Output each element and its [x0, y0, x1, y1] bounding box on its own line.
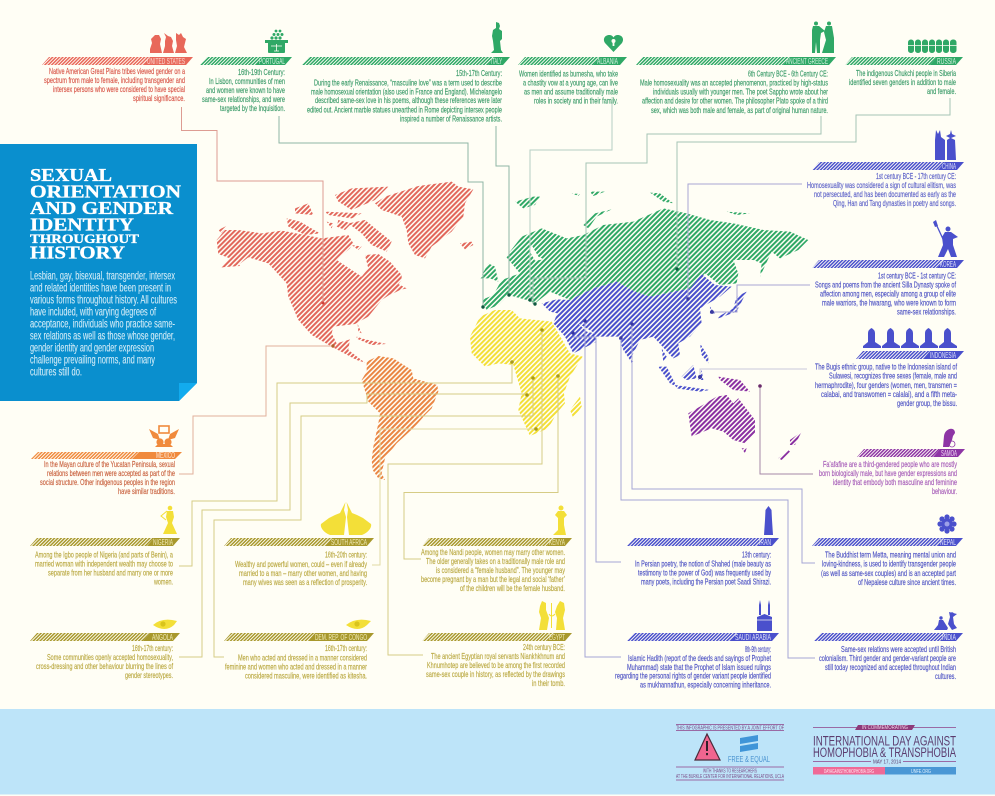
label bar: [636, 57, 836, 66]
text: Muhammad) state that the Prophet of Islam issued rulings: [627, 663, 771, 672]
icon: two egyptian figures: [539, 601, 565, 630]
map: south and east asia: [542, 274, 747, 392]
label bar: CHINA: [942, 162, 956, 171]
label bar: INDIA: [942, 633, 957, 642]
panel: Indonesia: [815, 328, 964, 408]
panel: Egypt: [422, 601, 572, 688]
text: individuals usually with younger men. The poet Sappho wrote about her: [653, 88, 828, 96]
title: IDENTITY: [30, 214, 134, 234]
label bar: [30, 538, 180, 547]
text: [35, 550, 173, 586]
text: gender group, the bissu.: [897, 399, 957, 408]
label bar: [857, 449, 965, 458]
text: a chastity vow at a young age, can live: [523, 78, 618, 88]
text: [849, 69, 956, 96]
icon: warrior with axe: [933, 220, 958, 257]
text: become pregnant by a man but the legal and social ‘father’: [421, 575, 565, 584]
panel: Albania: [518, 35, 627, 105]
label bar: [31, 451, 182, 460]
text: as mukhannathun, especially concerning inheritance.: [640, 680, 771, 690]
intro text: [30, 268, 177, 378]
text: 16th-17th century:: [132, 644, 173, 653]
icon: two women in wide skirts: [321, 502, 371, 535]
text: 15th-17th Century:: [456, 69, 502, 78]
text: relations between men were accepted as part of the: [47, 469, 175, 478]
panel: Nigeria: [30, 506, 180, 586]
panel: Democratic Republic of Congo: [224, 620, 374, 680]
text: in their tomb.: [532, 679, 565, 688]
panel: title and intro: [0, 144, 197, 401]
text: intersex persons who were considered to have special: [53, 85, 185, 94]
panel: Ancient Greece: [636, 22, 836, 115]
icon: five capped busts: [863, 328, 957, 348]
map: north america: [217, 182, 473, 363]
icon: two figures: [812, 22, 834, 53]
text: [635, 550, 772, 586]
icon: robed figure: [764, 506, 773, 535]
label bar: INDONESIA: [930, 351, 956, 360]
icon: kaaba and minarets: [757, 600, 772, 631]
text: regarding the personal rights of gender variant people identified: [615, 672, 771, 680]
text: same-sex relationships, and were: [202, 95, 285, 104]
panel: China: [807, 130, 964, 208]
label bar: [627, 633, 779, 642]
text: Male homosexuality was an accepted phenomenon, practiced by high-status: [640, 78, 828, 88]
text: married to a man – marry other women, and having: [239, 569, 367, 578]
label bar: UNITED STATES: [147, 57, 185, 66]
text: The older generally takes on a traditionally male role and: [426, 557, 565, 566]
label bar: [814, 633, 963, 642]
text: married woman with independent wealth may choose to: [35, 560, 173, 568]
label bar: IRAN: [759, 538, 771, 547]
text: [426, 643, 565, 688]
icon: eye: [346, 620, 371, 629]
panel: Saudi Arabia: 8th-9th century:: [745, 645, 771, 654]
text: targeted by the Inquisition.: [220, 104, 285, 113]
panel: Portugal: [200, 30, 292, 113]
intro text: challenge prevailing norms, and many: [30, 352, 155, 366]
text: roles in society and in their family.: [534, 96, 618, 106]
logo: warning triangle: [695, 734, 720, 760]
label bar: ANGOLA: [152, 633, 174, 642]
text: separate from her husband and marry one or more: [48, 568, 173, 578]
credits: [676, 724, 784, 780]
text: [815, 362, 957, 408]
icon: mandala flower: [937, 514, 957, 534]
title: AND GENDER: [30, 198, 174, 218]
text: and women were known to have: [206, 86, 285, 95]
label bar: DEM. REP. OF CONGO: [315, 633, 367, 642]
panel: Samoa: [819, 429, 965, 496]
panel: United States: [42, 33, 193, 103]
text: Wealthy and powerful women, could – even if already: [235, 560, 368, 569]
text: [821, 550, 956, 587]
intro text: and related identities have been present in: [30, 280, 171, 294]
idahot logo: MAY 17, 2014: [873, 760, 901, 766]
text: affection and desire for other women. The philosopher Plato spoke of a third: [642, 96, 828, 106]
text: 13th century:: [742, 550, 771, 560]
label bar: [30, 633, 180, 642]
text: Some communities openly accepted homosexuality,: [47, 653, 173, 662]
text: spectrum from male to female, including transgender and: [44, 76, 185, 85]
text: testimony to the power of God) was frequently used by: [638, 568, 772, 578]
icon: woman in gown: [161, 506, 177, 534]
credits: AT THE BURKLE CENTER FOR INTERNATIONAL RELATIONS, UCLA: [676, 774, 784, 780]
text: [225, 644, 367, 680]
text: [819, 645, 956, 681]
label bar: [302, 57, 510, 66]
icon: standing woman: [553, 506, 567, 535]
text: cross-dressing and other behaviour blurring the lines of: [36, 662, 173, 671]
text: The ancient Egyptian royal servants Niankhkhnum and: [431, 652, 565, 661]
label bar: EGYPT: [549, 633, 565, 642]
text: women.: [153, 578, 173, 586]
title: ORIENTATION: [30, 182, 181, 202]
text: social structure. Other indigenous peoples in the region: [40, 478, 175, 487]
icon: heart with keyhole: [604, 35, 623, 52]
credits: THIS INFOGRAPHIC IS PRESENTED BY A JOINT EFFORT OF: [676, 726, 784, 732]
intro text: gender identity and gender expression: [30, 340, 154, 354]
icon: statue: [491, 22, 503, 53]
text: [421, 548, 566, 593]
connector lines: [179, 98, 950, 658]
label bar: [812, 260, 964, 269]
idahot logo: IN COMMEMORATING: [862, 725, 908, 731]
panel: South Africa: [224, 502, 374, 587]
text: spiritual significance.: [133, 94, 185, 103]
text: [519, 70, 618, 106]
label bar: ALBANIA: [597, 57, 619, 66]
label bar: [422, 633, 572, 642]
icon: seven dolls: [908, 40, 957, 53]
text: male homosexual orientation (also used in France and England). Michelangelo: [311, 88, 502, 96]
panel: Iran: [627, 506, 779, 586]
title: [30, 165, 181, 262]
text: many poets, including the Persian poet Saadi Shirazi.: [641, 578, 771, 586]
label bar: RUSSIA: [937, 57, 957, 66]
text: have similar traditions.: [118, 487, 175, 496]
location dots: [322, 267, 762, 431]
text: of the children will be the female husband.: [460, 584, 565, 593]
panel: India: [814, 612, 963, 681]
label bar: ITALY: [491, 57, 502, 66]
text: [235, 550, 368, 587]
text: as men and assume traditionally male: [524, 88, 618, 96]
panel: Nepal: [812, 514, 963, 587]
text: [44, 67, 185, 103]
world map: [217, 182, 808, 480]
label bar: SAUDI ARABIA: [735, 633, 772, 642]
text: [36, 644, 173, 680]
text: During the early Renaissance, “masculine love” was a term used to describe: [314, 78, 502, 88]
panel: Kenya: [421, 506, 572, 593]
text: Among the Igbo people of Nigeria (and parts of Benin), a: [35, 550, 173, 560]
text: [202, 68, 285, 113]
label bar: [42, 57, 193, 66]
text: [615, 645, 771, 690]
text: In the Mayan culture of the Yucatan Peninsula, sexual: [44, 460, 175, 469]
text: gender stereotypes.: [125, 671, 173, 680]
title: THROUGHOUT: [30, 232, 140, 246]
label bar: MEXICO: [156, 451, 175, 460]
map: oceania: [688, 377, 802, 460]
text: 16th-20th century:: [325, 550, 367, 560]
panel: Italy: [302, 22, 510, 124]
text: In Persian poetry, the notion of Shahed (male beauty as: [635, 560, 771, 568]
label bar: KENYA: [549, 538, 565, 547]
panel: Angola: [30, 620, 180, 680]
text: described same-sex love in his poems, although these references were later: [315, 96, 502, 105]
title: SEXUAL: [30, 165, 112, 185]
label bar: NEPAL: [940, 538, 956, 547]
icon: two dancers: [934, 612, 957, 630]
label bar: [224, 633, 374, 642]
text: same-sex relationships.: [897, 308, 956, 316]
idahot logo: [813, 725, 956, 775]
text: cultures.: [935, 672, 956, 681]
icon: two robed figures: [935, 130, 956, 160]
text: [819, 460, 958, 496]
label bar: [812, 538, 963, 547]
label bar: [224, 538, 374, 547]
label bar: [812, 162, 964, 171]
intro text: have included, with varying degrees of: [30, 304, 156, 318]
text: [640, 70, 828, 115]
text: feminine and women who acted and dressed in a manner: [225, 662, 367, 672]
panel: Korea: [812, 220, 964, 316]
text: [815, 272, 956, 316]
text: [807, 172, 956, 208]
idahot logo: UNFE.ORG: [911, 769, 931, 775]
panel: Mexico: [31, 426, 182, 496]
text: is considered a “female husband”. The younger may: [436, 566, 566, 575]
text: 24th century BCE:: [523, 643, 565, 652]
text: Islamic Hadith (report of the deeds and sayings of Prophet: [628, 654, 771, 663]
label bar: PORTUGAL: [259, 57, 285, 66]
text: Men who acted and dressed in a manner considered: [238, 654, 367, 662]
text: behaviour.: [932, 487, 957, 496]
text: same-sex couple in history, as reflected by the drawings: [426, 670, 565, 679]
text: considered masculine, were identified as kitesha.: [245, 672, 367, 680]
panel: Saudi Arabia: [615, 600, 779, 690]
text: In Lisbon, communities of men: [209, 77, 285, 86]
label bar: [856, 351, 964, 360]
icon: pile on scales box: [265, 30, 288, 53]
text: 16th-17th century:: [325, 644, 367, 653]
idahot logo: DAYAGAINSTHOMOPHOBIA.ORG: [824, 769, 874, 775]
intro text: various forms throughout history. All cultures: [30, 292, 177, 306]
text: Women identified as burnesha, who take: [519, 70, 618, 78]
title: HISTORY: [30, 242, 125, 262]
label bar: [422, 538, 572, 547]
map: south america: [362, 356, 438, 480]
intro text: Lesbian, gay, bisexual, transgender, intersex: [30, 268, 175, 282]
text: sex, which was both male and female, as part of original human nature.: [651, 106, 828, 115]
map: europe and north asia: [480, 192, 808, 310]
text: inspired a number of Renaissance artists.: [400, 114, 502, 124]
label bar: NIGERIA: [153, 538, 173, 547]
text: Khnumhotep are believed to be among the first recorded: [427, 661, 565, 670]
text: 16th-19th Century:: [238, 68, 285, 77]
label bar: [627, 538, 779, 547]
text: edited out. Ancient marble statues unearthed in Rome depicting intersex people: [307, 106, 502, 114]
text: many wives was seen as a reflection of prosperity.: [243, 578, 367, 587]
label bar: ANCIENT GREECE: [786, 57, 828, 66]
icon: mayan emblem: [149, 426, 179, 447]
intro text: acceptance, individuals who practice same-: [30, 316, 175, 330]
panel: Russia: [845, 40, 963, 96]
text: and female.: [927, 87, 956, 96]
text: Among the Nandi people, women may marry other women.: [421, 548, 565, 557]
icon: three native american heads: [150, 33, 187, 53]
credits: WITH THANKS TO RESEARCHERS: [703, 768, 757, 774]
logo: free and equal: FREE & EQUAL: [728, 755, 770, 764]
map: africa: [470, 310, 583, 436]
label bar: KOREA: [940, 260, 956, 269]
text: [307, 69, 502, 124]
label bar: SOUTH AFRICA: [331, 538, 367, 547]
intro text: cultures still do.: [30, 364, 82, 378]
icon: eye: [153, 620, 177, 629]
text: Native American Great Plains tribes viewed gender on a: [49, 67, 185, 76]
intro text: sex relations as well as those whose gender,: [30, 328, 175, 342]
label bar: SAMOA: [941, 449, 957, 458]
text: 6th Century BCE - 6th Century CE:: [748, 70, 828, 78]
icon: long haired profile: [943, 429, 955, 447]
text: [40, 460, 175, 496]
footer band: [0, 709, 995, 794]
